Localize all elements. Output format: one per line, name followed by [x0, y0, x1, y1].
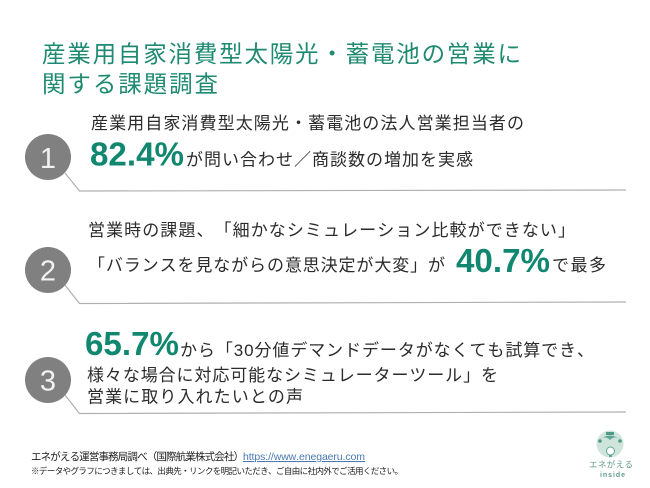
- text: finding 3 second line: 様々な場合に対応可能なシミュレーターツール」を: [87, 366, 498, 385]
- text: finding 1 description: 産業用自家消費型太陽光・蓄電池の法人営業担当者の: [91, 114, 524, 133]
- source footer: https://www.enegaeru.com: [243, 451, 365, 463]
- number badge 2: 2: [40, 256, 56, 288]
- logo: エネがえる inside: [589, 430, 633, 479]
- text: finding 1 result: が問い合わせ／商談数の増加を実感: [186, 150, 473, 170]
- title: [42, 41, 521, 97]
- leader line 3: [65, 395, 626, 414]
- logo: エネがえる inside: エネがえる: [589, 460, 633, 470]
- text: finding 2 result: で最多: [552, 256, 606, 275]
- number badge 1: [25, 134, 71, 180]
- number badge 1: 1: [40, 143, 56, 175]
- statistic 65.7%: 65.7%: [85, 325, 179, 362]
- number badge 3: [25, 357, 71, 403]
- text: finding 2 description: 営業時の課題、「細かなシミュレーション比較ができない」: [88, 221, 575, 240]
- source footer: エネがえる運営事務局調べ（国際航業株式会社）: [31, 450, 244, 463]
- source footer: [31, 450, 403, 476]
- statistic 82.4%: 82.4%: [90, 136, 184, 172]
- text: finding 2 second line: 「バランスを見ながらの意思決定が大変」が: [88, 256, 445, 275]
- panel: finding 1: [25, 114, 626, 191]
- statistic 40.7%: 40.7%: [456, 242, 550, 279]
- source footer: ※データやグラフにつきましては、出典先・リンクを明記いただき、ご自由に社内外でご活用ください。: [31, 466, 403, 476]
- text: finding 3 first line: から「30分値デマンドデータがなくても試算でき、: [180, 340, 594, 360]
- text: finding 3 third line: 営業に取り入れたいとの声: [87, 388, 303, 406]
- title: 産業用自家消費型太陽光・蓄電池の営業に: [42, 41, 521, 67]
- panel: finding 3: [25, 325, 626, 414]
- number badge 2: [25, 247, 71, 293]
- leader line 2: [65, 285, 626, 304]
- panel: finding 2: [25, 221, 626, 304]
- leader line 1: [65, 173, 626, 191]
- title: 関する課題調査: [42, 71, 218, 97]
- number badge 3: 3: [40, 366, 56, 398]
- logo: エネがえる inside: inside: [600, 472, 625, 479]
